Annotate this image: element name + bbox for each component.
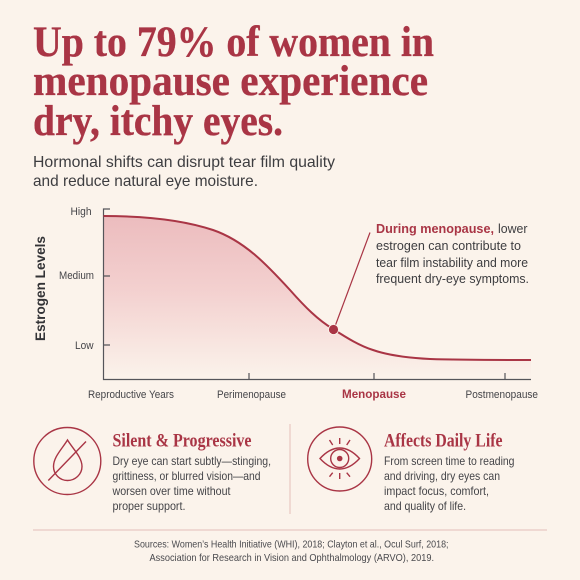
body text: and driving, dry eyes can	[384, 469, 500, 483]
x-axis labels: Menopause	[342, 387, 406, 401]
subtitle	[33, 154, 335, 190]
y-axis labels	[59, 206, 94, 352]
title: menopause experience	[33, 58, 428, 105]
icon: eye with rays	[308, 427, 372, 491]
area under curve	[104, 216, 531, 379]
body text	[112, 454, 271, 513]
callout text: During menopause,	[376, 221, 494, 236]
x-axis labels: Reproductive Years	[88, 389, 174, 401]
title: Up to 79% of women in	[33, 19, 434, 66]
subtitle: Hormonal shifts can disrupt tear film quality	[33, 154, 335, 171]
axes	[104, 209, 531, 380]
body text: grittiness, or blurred vision—and	[112, 469, 260, 483]
x-axis labels	[88, 387, 538, 401]
axis ticks	[104, 276, 505, 379]
body text: worsen over time without	[112, 484, 231, 498]
body text: and quality of life.	[384, 499, 466, 513]
title: dry, itchy eyes.	[33, 98, 283, 145]
panel: silent and progressive	[34, 428, 271, 513]
title	[33, 19, 434, 145]
panel: affects daily life	[308, 427, 514, 513]
estrogen curve	[104, 216, 531, 360]
y-axis labels: Medium	[59, 270, 94, 282]
callout text: estrogen can contribute to	[376, 238, 521, 253]
callout leader line	[336, 232, 370, 325]
body text: Dry eye can start subtly—stinging,	[112, 454, 271, 468]
sources: Sources: Women’s Health Initiative (WHI), 2018; Clayton et al., Ocul Surf, 2018;	[134, 540, 448, 550]
heading: Silent & Progressive	[112, 432, 252, 452]
callout marker	[328, 324, 338, 334]
callout text	[376, 221, 529, 286]
chart: estrogen levels over time	[32, 206, 538, 401]
sources: Association for Research in Vision and Ophthalmology (ARVO), 2019.	[150, 553, 434, 564]
sources	[134, 540, 448, 564]
subtitle: and reduce natural eye moisture.	[33, 173, 258, 190]
x-axis labels: Postmenopause	[466, 389, 538, 401]
callout text: lower	[498, 221, 528, 236]
x-axis labels: Perimenopause	[217, 389, 286, 401]
y-axis title: Estrogen Levels	[32, 236, 48, 341]
body text: impact focus, comfort,	[384, 484, 489, 498]
heading: Affects Daily Life	[384, 432, 502, 452]
callout text: tear film instability and more	[376, 255, 528, 270]
body text: proper support.	[112, 499, 186, 513]
callout text: frequent dry-eye symptoms.	[376, 271, 529, 286]
y-axis labels: Low	[75, 340, 94, 352]
y-axis labels: High	[70, 206, 92, 218]
body text: From screen time to reading	[384, 454, 514, 468]
body text	[384, 454, 514, 513]
icon: crossed-out water drop	[34, 428, 101, 494]
